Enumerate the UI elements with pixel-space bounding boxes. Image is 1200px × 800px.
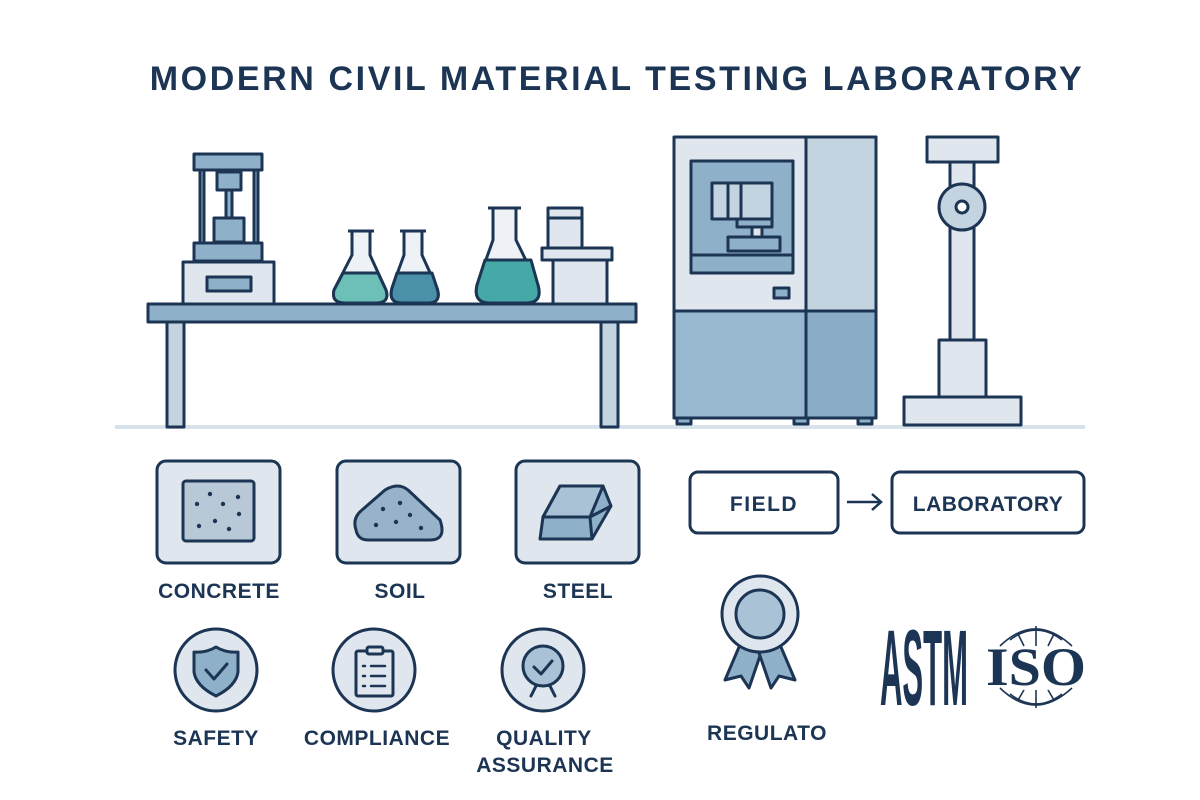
label: quality assurance: QUALITY [496,727,592,750]
label: soil: SOIL [374,580,426,603]
label: compliance: COMPLIANCE [304,727,450,750]
icon: compliance [333,629,415,711]
testing machine cabinet [674,137,876,424]
icon: regulatory ribbon [722,576,798,688]
label: safety: SAFETY [173,727,259,750]
tensile test stand [904,137,1021,425]
icon: concrete [157,461,280,563]
label: regulato: REGULATO [707,722,827,745]
flow: field to laboratory: FIELD [730,493,798,516]
icon: steel [516,461,639,563]
label: concrete: CONCRETE [158,580,280,603]
title: MODERN CIVIL MATERIAL TESTING LABORATORY [150,60,1084,98]
icon: soil [337,461,460,563]
label: quality assurance [476,727,614,777]
compression press [183,154,274,304]
flow: field to laboratory: LABORATORY [913,493,1063,516]
label: quality assurance: ASSURANCE [476,754,614,777]
icon: safety [175,629,257,711]
lab bench [148,304,636,427]
flow: field to laboratory [690,472,1084,533]
label: steel: STEEL [543,580,613,603]
logo: ASTM: ASTM [880,608,968,729]
flasks [333,208,539,303]
arrow [847,494,881,510]
logo: ISO: ISO [986,637,1086,697]
icon: quality assurance [502,629,584,711]
sample containers [542,208,612,304]
logo: ISO [986,626,1086,708]
